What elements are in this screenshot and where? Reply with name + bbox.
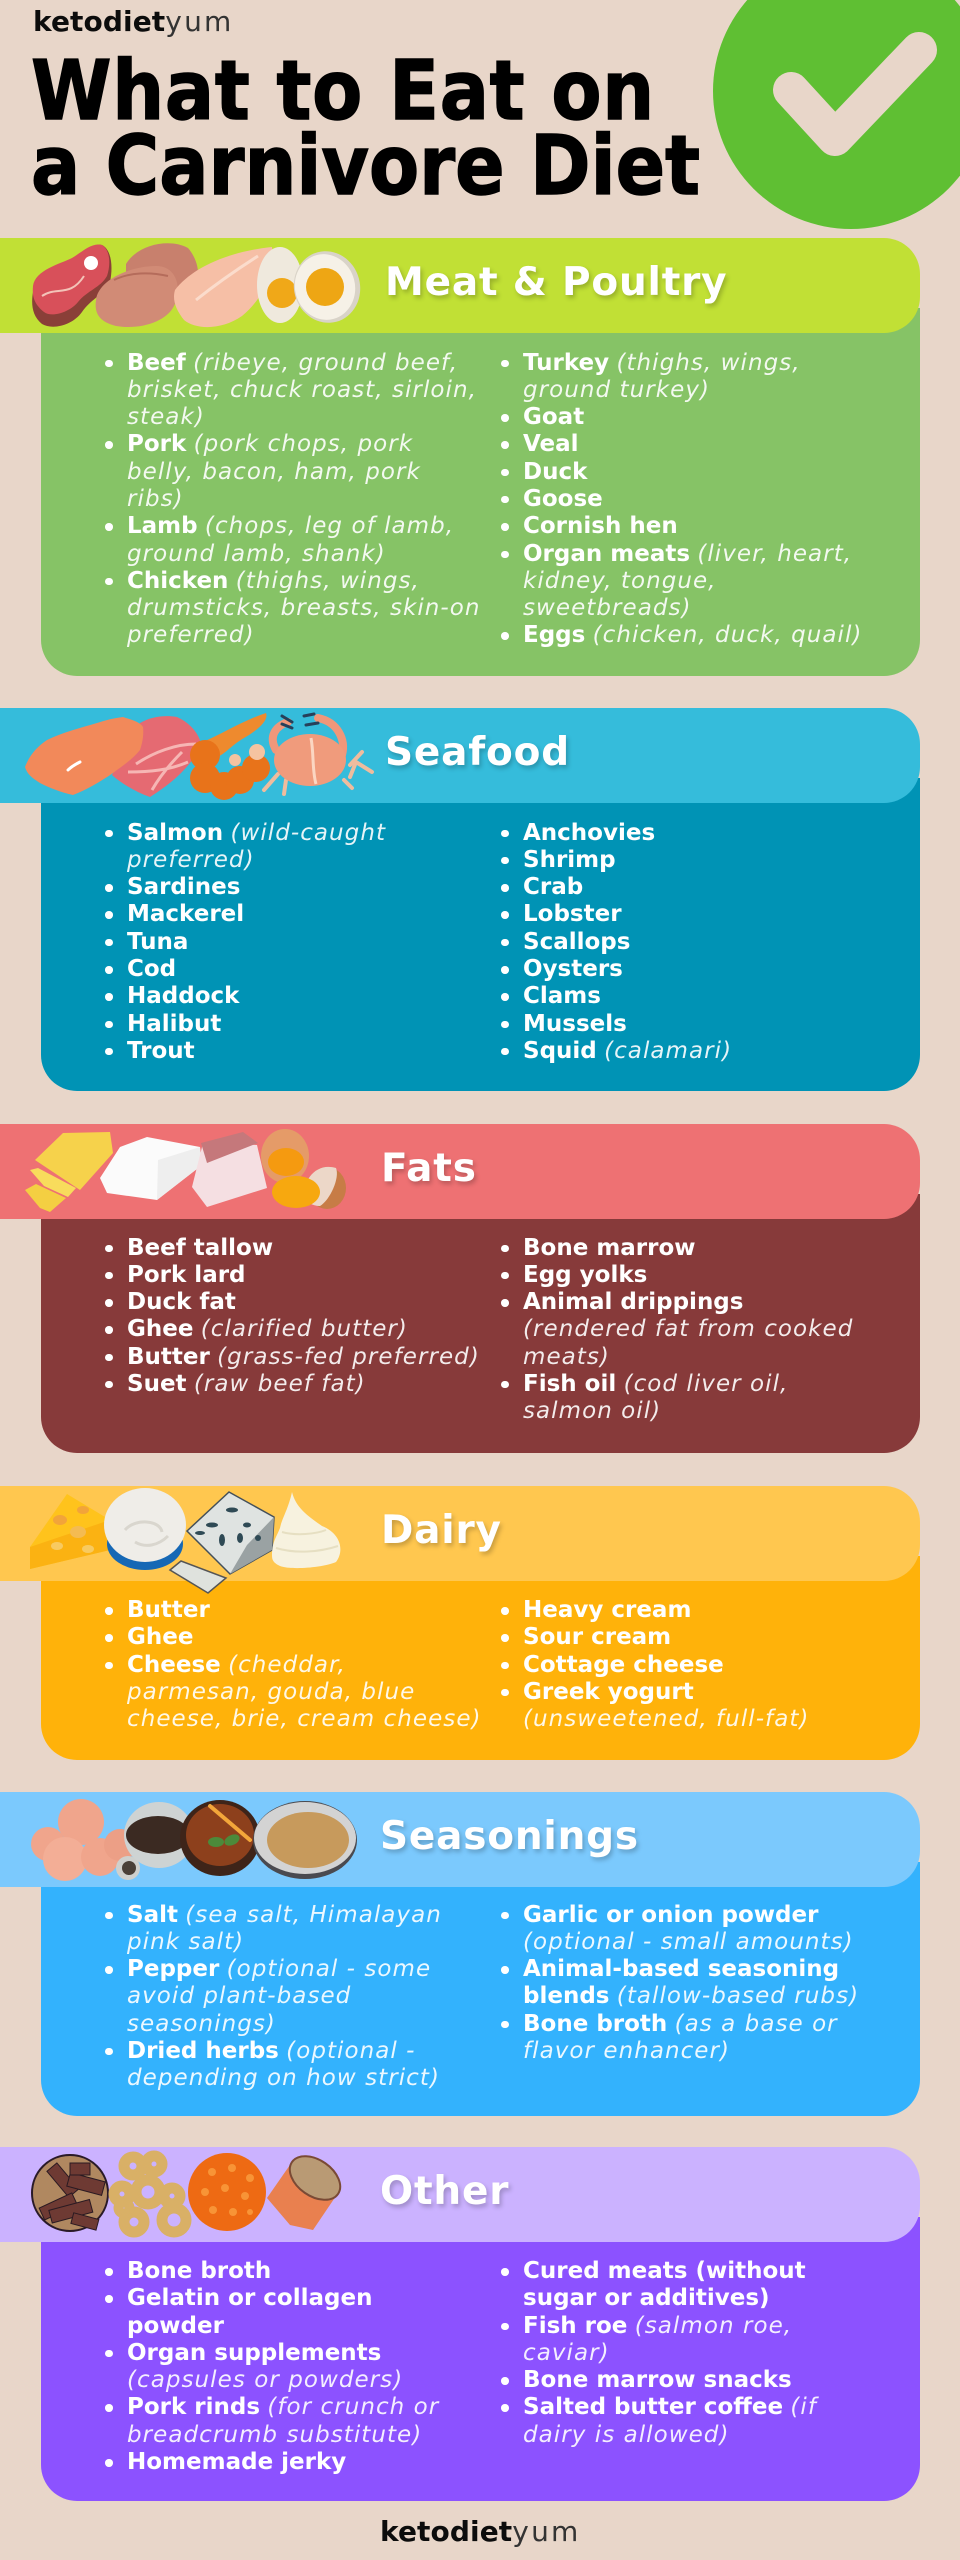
list: meat right column: Goat <box>523 404 584 430</box>
panel: seasonings <box>0 1792 920 2116</box>
list: fats right column: Animal drippings <box>523 1289 743 1315</box>
icon: sour cream bowl <box>104 1488 186 1570</box>
list: meat right column: Duck <box>523 459 587 485</box>
list: other right column: caviar) <box>523 2340 610 2366</box>
list: seafood right column <box>501 820 732 1064</box>
list: seafood right column: Anchovies <box>523 820 655 846</box>
icon: crab <box>264 714 372 794</box>
list: dairy left column: Ghee <box>127 1624 193 1650</box>
list: dairy right column: Heavy cream <box>523 1597 691 1623</box>
list: fats left column: Ghee (clarified butter) <box>127 1316 408 1342</box>
list: meat left column: Chicken (thighs, wings, <box>127 568 420 594</box>
list: seasonings left column: pink salt) <box>127 1929 244 1955</box>
list: seafood right column: Scallops <box>523 929 630 955</box>
panel body: meat list background <box>41 308 920 676</box>
list: seafood right column: Mussels <box>523 1011 627 1037</box>
icon: butter <box>25 1132 113 1212</box>
list: seafood left column: Mackerel <box>127 901 244 927</box>
list: meat right column: ground turkey) <box>523 377 710 403</box>
list: seafood right column: Squid (calamari) <box>523 1038 732 1064</box>
list: fats right column: Egg yolks <box>523 1262 647 1288</box>
list: other left column <box>105 2258 440 2475</box>
list: fats right column: meats) <box>523 1344 610 1370</box>
list: dairy right column: (unsweetened, full-fat) <box>523 1706 809 1732</box>
list: seafood left column <box>105 820 386 1064</box>
list: other right column: dairy is allowed) <box>523 2422 729 2448</box>
list: other left column: Gelatin or collagen <box>127 2285 372 2311</box>
icons: fats <box>25 1129 346 1212</box>
list: seafood left column: Haddock <box>127 983 239 1009</box>
list: other left column: Homemade jerky <box>127 2449 346 2475</box>
icon: broth bowl <box>253 1801 357 1879</box>
section header bar: dairy <box>0 1486 920 1581</box>
list: other left column: Organ supplements <box>127 2340 381 2366</box>
list: seafood right column: Crab <box>523 874 583 900</box>
panel: fats <box>0 1124 920 1453</box>
list: seasonings right column: blends (tallow-based rubs) <box>523 1983 859 2009</box>
icon: tuna steak <box>112 716 200 797</box>
list: meat left column: Pork (pork chops, pork <box>127 431 413 457</box>
heading: dairy: Dairy <box>381 1508 502 1553</box>
heading: seafood: Seafood <box>385 730 570 775</box>
list: other right column <box>501 2258 819 2448</box>
icons: meat and eggs <box>32 243 360 328</box>
list: other right column: sugar or additives) <box>523 2285 770 2311</box>
list: fats left column: Duck fat <box>127 1289 236 1315</box>
list: seasonings left column: depending on how strict) <box>127 2065 440 2091</box>
list: dairy right column <box>501 1597 809 1732</box>
list: meat left column: ribs) <box>127 486 184 512</box>
panel: meat and poultry <box>0 238 920 676</box>
panel: dairy <box>0 1486 920 1760</box>
section header bar: seasonings <box>0 1792 920 1887</box>
list: fats right column: Fish oil (cod liver oil, <box>523 1371 788 1397</box>
list: meat right column: Turkey (thighs, wings, <box>523 350 801 376</box>
list: fats left column: Beef tallow <box>127 1234 273 1260</box>
icon: pink salt crystals <box>31 1799 140 1881</box>
panel body: dairy list background <box>41 1556 920 1760</box>
list: meat left column: brisket, chuck roast, sirloin, <box>127 377 477 403</box>
list: seasonings left column: Dried herbs (optional - <box>127 2038 416 2064</box>
icon: halved eggs <box>257 244 368 330</box>
icons: seafood <box>25 712 374 800</box>
title: What to Eat on <box>31 44 655 139</box>
icon: fish roe <box>188 2153 266 2231</box>
section header bar: fats <box>0 1124 920 1219</box>
list: seasonings left column: Pepper (optional - some <box>127 1956 431 1982</box>
list: seasonings right column: Bone broth (as a base or <box>523 2011 838 2037</box>
panel: other <box>0 2147 920 2501</box>
list: meat right column <box>501 350 862 648</box>
list: dairy left column: parmesan, gouda, blue <box>127 1679 415 1705</box>
list: other left column: breadcrumb substitute) <box>127 2422 422 2448</box>
list: other right column: Salted butter coffee (if <box>523 2394 817 2420</box>
list: dairy right column: Sour cream <box>523 1624 671 1650</box>
logo: bottom: ketodietyum <box>380 2515 580 2548</box>
title: a Carnivore Diet <box>31 119 700 214</box>
list: fats left column: Suet (raw beef fat) <box>127 1371 366 1397</box>
list: dairy left column: Cheese (cheddar, <box>127 1652 346 1678</box>
list: seafood left column: Salmon (wild-caught <box>127 820 386 846</box>
list: seafood left column: Trout <box>127 1038 195 1064</box>
list: seasonings left column: avoid plant-based <box>127 1983 351 2009</box>
section header bar: other <box>0 2147 920 2242</box>
icon: herb stew bowl <box>180 1800 260 1876</box>
list: seasonings left column: Salt (sea salt, Himalayan <box>127 1902 442 1928</box>
list: other right column: Bone marrow snacks <box>523 2367 792 2393</box>
list: dairy right column: Greek yogurt <box>523 1679 694 1705</box>
list: meat right column: Organ meats (liver, heart, <box>523 541 852 567</box>
section header bar: seafood <box>0 708 920 803</box>
icon: cracked egg and yolks <box>261 1129 346 1209</box>
list: other left column: Pork rinds (for crunch or <box>127 2394 439 2420</box>
list: meat left column <box>105 350 481 648</box>
list: seasonings left column: seasonings) <box>127 2011 276 2037</box>
icon: pepper bowl <box>124 1802 194 1868</box>
list: other right column: Fish roe (salmon roe, <box>523 2313 792 2339</box>
title <box>31 44 700 214</box>
list: meat left column: ground lamb, shank) <box>127 541 386 567</box>
list: dairy left column: cheese, brie, cream cheese) <box>127 1706 482 1732</box>
icon: pork rinds <box>114 2156 186 2232</box>
list: seafood left column: Halibut <box>127 1011 221 1037</box>
panel body: fats list background <box>41 1194 920 1453</box>
icon: shrimp <box>190 713 270 800</box>
icon: whipped cream <box>272 1492 340 1568</box>
list: meat left column: Beef (ribeye, ground beef, <box>127 350 458 376</box>
list: seafood right column: Clams <box>523 983 601 1009</box>
icon: steak <box>32 244 111 327</box>
list: fats right column <box>501 1234 853 1424</box>
list: seasonings right column: flavor enhancer) <box>523 2038 730 2064</box>
list: meat right column: Veal <box>523 431 579 457</box>
list: other right column: Cured meats (without <box>523 2258 806 2284</box>
list: other left column: (capsules or powders) <box>127 2367 403 2393</box>
list: meat right column: Eggs (chicken, duck, quail) <box>523 622 862 648</box>
icon: bone marrow <box>267 2147 348 2230</box>
list: other left column: Bone broth <box>127 2258 271 2284</box>
icon: cheese wedge <box>30 1494 110 1569</box>
icon: pork chops <box>96 243 198 327</box>
list: seafood right column: Shrimp <box>523 847 616 873</box>
icons: other foods <box>31 2150 342 2238</box>
list: seasonings right column <box>501 1902 859 2064</box>
panel: seafood <box>0 708 920 1091</box>
icon: jerky plate <box>32 2155 108 2231</box>
list: seafood right column: Lobster <box>523 901 622 927</box>
list: fats left column: Butter (grass-fed preferred) <box>127 1344 480 1370</box>
list: fats left column <box>105 1234 480 1397</box>
list: seafood right column: Oysters <box>523 956 623 982</box>
list: other left column: powder <box>127 2313 224 2339</box>
list: meat right column: Cornish hen <box>523 513 678 539</box>
icon: green check badge <box>713 0 960 229</box>
list: fats left column: Pork lard <box>127 1262 246 1288</box>
list: seafood left column: preferred) <box>127 847 255 873</box>
heading: fats: Fats <box>381 1146 477 1191</box>
list: meat left column: Lamb (chops, leg of lamb, <box>127 513 454 539</box>
list: seasonings right column: Garlic or onion powder <box>523 1902 818 1928</box>
icon: chicken breast <box>174 247 272 327</box>
list: meat right column: sweetbreads) <box>523 595 692 621</box>
list: seafood left column: Tuna <box>127 929 188 955</box>
icon: blue cheese <box>170 1492 274 1593</box>
list: seafood left column: Cod <box>127 956 176 982</box>
list: fats right column: (rendered fat from cooked <box>523 1316 853 1342</box>
icon: tallow block <box>100 1137 202 1200</box>
list: meat left column: steak) <box>127 404 205 430</box>
panel body: seafood list background <box>41 778 920 1091</box>
list: seasonings right column: Animal-based seasoning <box>523 1956 839 1982</box>
list: seafood left column: Sardines <box>127 874 240 900</box>
list: dairy left column <box>105 1597 482 1732</box>
list: dairy right column: Cottage cheese <box>523 1652 724 1678</box>
list: meat left column: preferred) <box>127 622 255 648</box>
heading: seasonings: Seasonings <box>380 1814 639 1859</box>
icons: seasonings <box>31 1799 357 1881</box>
list: dairy left column: Butter <box>127 1597 210 1623</box>
heading: other: Other <box>380 2169 509 2214</box>
icons: dairy <box>30 1488 340 1594</box>
list: fats right column: Bone marrow <box>523 1234 696 1260</box>
logo: top: ketodietyum <box>33 5 234 38</box>
panel body: seasonings list background <box>41 1862 920 2116</box>
list: meat left column: drumsticks, breasts, skin-on <box>127 595 481 621</box>
list: seasonings left column <box>105 1902 442 2091</box>
list: meat right column: Goose <box>523 486 603 512</box>
section header bar: meat <box>0 238 920 333</box>
list: meat right column: kidney, tongue, <box>523 568 717 594</box>
panel body: other list background <box>41 2217 920 2501</box>
icon: lard with bacon top <box>192 1132 267 1207</box>
list: seasonings right column: (optional - small amounts) <box>523 1929 854 1955</box>
icon: salmon fillet <box>25 717 143 795</box>
list: fats right column: salmon oil) <box>523 1398 661 1424</box>
list: meat left column: belly, bacon, ham, pork <box>127 459 421 485</box>
heading: meat and poultry: Meat & Poultry <box>385 260 727 305</box>
